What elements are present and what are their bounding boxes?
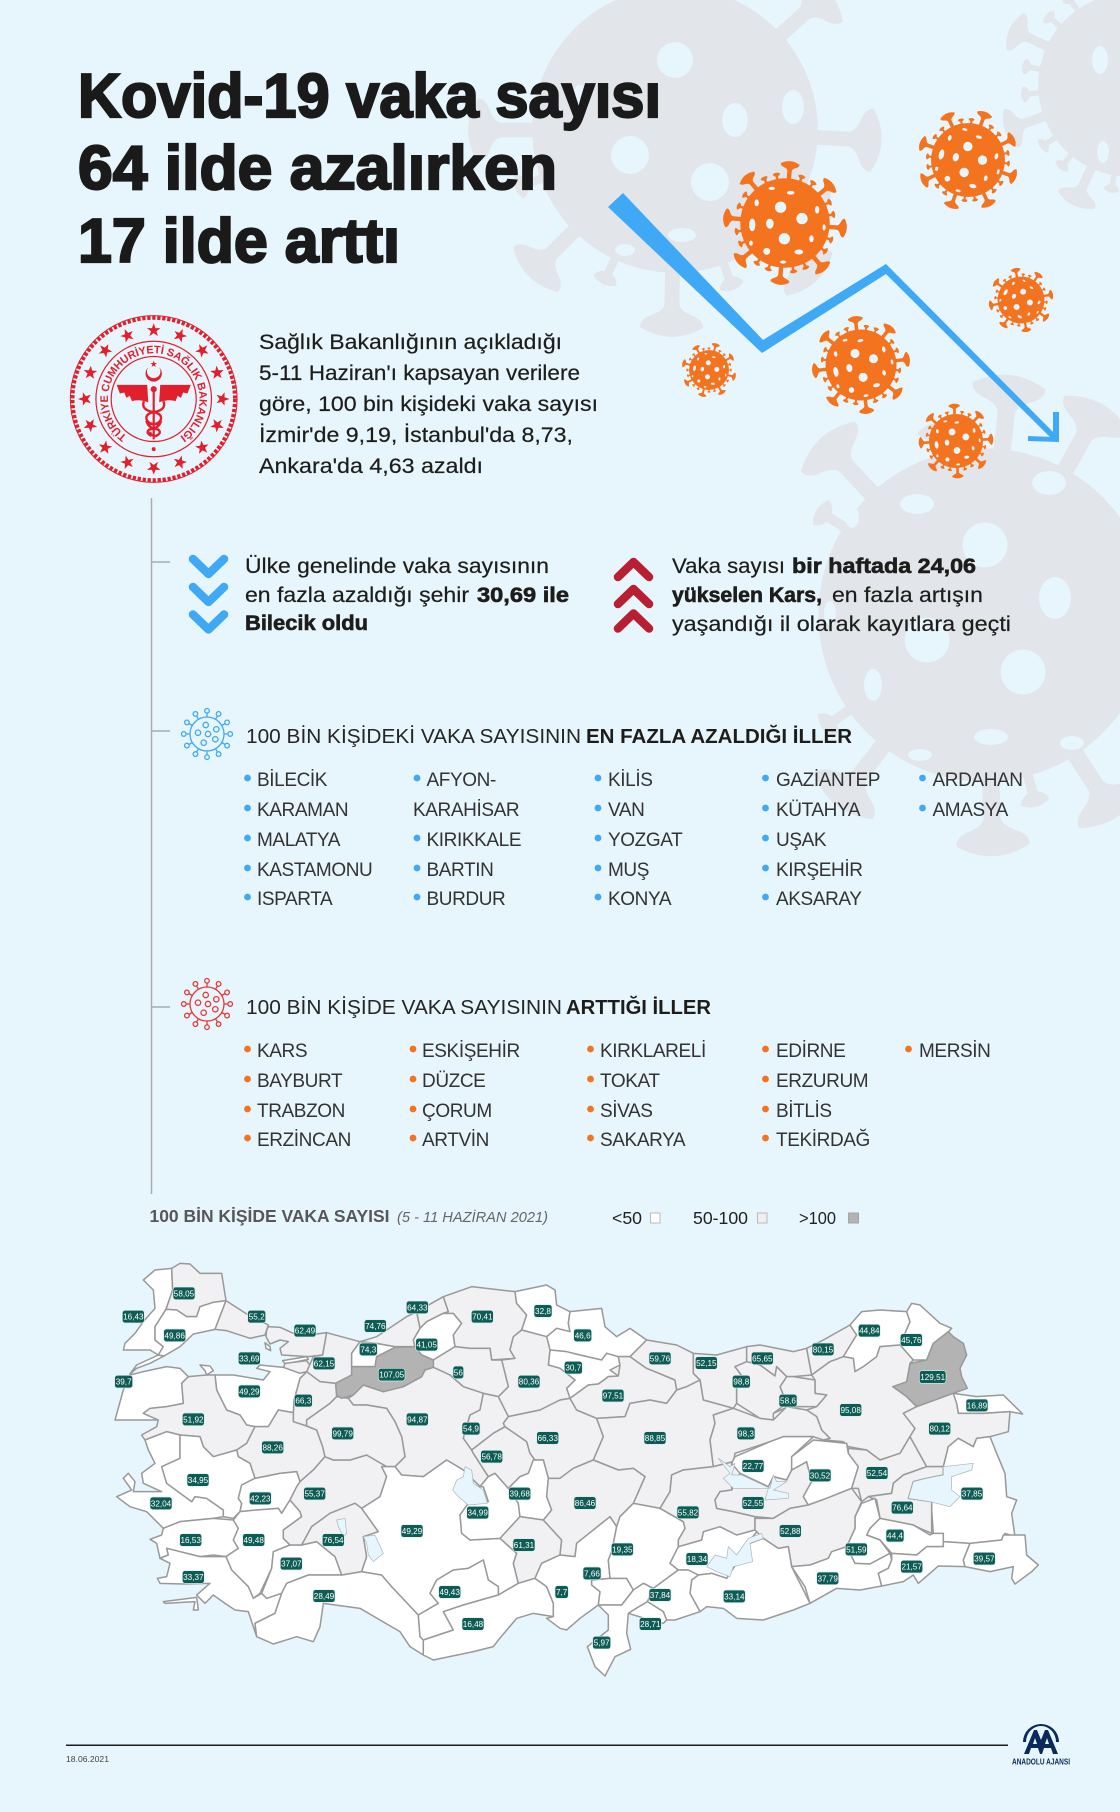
list: provinces with increase: EDİRNE	[776, 1041, 845, 1062]
value labels: 34,99	[467, 1509, 488, 1518]
title: 64 ilde azalırken	[78, 134, 557, 203]
list: provinces with decline: ARDAHAN	[932, 770, 1023, 791]
callout: largest increase: Vaka sayısı	[672, 555, 785, 578]
intro text: Sağlık Bakanlığının açıkladığı	[259, 331, 562, 354]
list: provinces with increase: SİVAS	[600, 1101, 653, 1122]
provinces: central south and east	[362, 1393, 1038, 1676]
value labels: 33,37	[183, 1573, 204, 1582]
value labels: 52,15	[696, 1359, 717, 1368]
value labels: 62,15	[314, 1359, 335, 1368]
value labels: 80,15	[813, 1345, 834, 1354]
value labels: 51,59	[846, 1545, 867, 1554]
list: provinces with increase: ARTVİN	[422, 1130, 489, 1151]
value labels: 74,3	[360, 1345, 377, 1354]
value labels: 49,86	[164, 1331, 185, 1340]
value labels: 16,48	[463, 1620, 484, 1629]
value labels: 52,54	[867, 1469, 888, 1478]
heading: provinces with increase: ARTTIĞI İLLER	[566, 995, 712, 1019]
value labels: 80,12	[929, 1425, 950, 1434]
map heading: (5 - 11 HAZİRAN 2021)	[397, 1209, 548, 1226]
callout: largest decline: Ülke genelinde vaka sayısının	[245, 555, 549, 578]
logo: Ministry of Health seal	[70, 315, 238, 483]
intro text: Ankara'da 4,63 azaldı	[259, 455, 483, 478]
value labels: 19,35	[612, 1545, 633, 1554]
title: 17 ilde arttı	[78, 207, 400, 276]
value labels: 33,69	[239, 1354, 260, 1363]
list: provinces with increase: ERZİNCAN	[257, 1130, 351, 1151]
icon: blue virus outline	[182, 708, 232, 760]
value labels: 33,14	[724, 1592, 745, 1601]
value labels: 37,79	[817, 1574, 838, 1583]
value labels: 52,88	[780, 1527, 801, 1536]
value labels: 22,77	[743, 1462, 764, 1471]
lakes	[337, 1458, 973, 1577]
background virus: top right	[958, 0, 1120, 257]
value labels: 39,57	[974, 1555, 995, 1564]
list: provinces with decline: KARAHİSAR	[413, 800, 519, 821]
provinces: west	[115, 1263, 423, 1655]
callout: largest increase	[672, 555, 1011, 636]
value labels: 44,84	[859, 1327, 880, 1336]
value labels: 98,8	[733, 1378, 750, 1387]
list: provinces with increase: KIRKLARELİ	[600, 1041, 706, 1062]
icon: virus top right	[905, 97, 1031, 223]
value labels: 95,08	[840, 1406, 861, 1415]
heading: provinces with increase: 100 BİN KİŞİDE VAKA SAYISININ	[246, 996, 562, 1019]
icon: red virus outline	[182, 978, 232, 1030]
map heading	[150, 1206, 548, 1226]
map heading: 100 BİN KİŞİDE VAKA SAYISI	[150, 1206, 390, 1226]
list: provinces with decline: AKSARAY	[776, 889, 862, 910]
list: provinces with decline: KIRIKKALE	[426, 830, 521, 851]
value labels: 5,97	[594, 1639, 610, 1648]
value labels: 97,51	[603, 1392, 624, 1401]
value labels: 86,46	[575, 1499, 596, 1508]
list: provinces with increase: ÇORUM	[422, 1101, 492, 1122]
title	[78, 62, 661, 276]
value labels: 55,82	[678, 1508, 699, 1517]
list: provinces with decline: AMASYA	[932, 800, 1009, 821]
list: provinces with decline: BURDUR	[426, 889, 505, 910]
list: provinces with decline: KÜTAHYA	[776, 800, 861, 821]
value labels: 46,6	[575, 1331, 591, 1340]
value labels: 55,2	[249, 1313, 265, 1322]
value labels: 64,33	[407, 1303, 428, 1312]
list: provinces with decline	[244, 770, 1023, 910]
value labels: 59,76	[650, 1354, 671, 1363]
value labels: 16,53	[180, 1536, 201, 1545]
value labels: 65,65	[752, 1354, 773, 1363]
icon: virus bottom	[913, 398, 999, 484]
value labels: 76,64	[892, 1504, 913, 1513]
list: provinces with decline: VAN	[608, 800, 644, 821]
value labels: 70,41	[472, 1313, 493, 1322]
value labels: 49,29	[402, 1527, 423, 1536]
value labels: 58,6	[780, 1397, 796, 1406]
list: provinces with increase: TEKİRDAĞ	[776, 1129, 870, 1151]
list: provinces with increase: MERSİN	[919, 1041, 990, 1062]
icon: virus small right	[976, 255, 1066, 345]
value labels: 88,85	[645, 1434, 666, 1443]
list: provinces with decline: UŞAK	[776, 830, 827, 851]
value labels: 51,92	[183, 1415, 204, 1424]
value labels: 80,36	[519, 1378, 540, 1387]
list: provinces with increase: KARS	[257, 1041, 307, 1062]
heading: largest decline provinces: 100 BİN KİŞİDEKİ VAKA SAYISININ	[246, 725, 581, 748]
value labels: 66,33	[537, 1434, 558, 1443]
value labels: 61,31	[514, 1541, 535, 1550]
value labels: 44,4	[887, 1532, 903, 1541]
callout: largest decline: 30,69 ile	[477, 584, 569, 607]
callout: largest increase: yükselen Kars,	[672, 584, 822, 607]
timeline vertical line with ticks	[152, 498, 170, 1194]
list: provinces with increase: TOKAT	[600, 1071, 660, 1092]
icon: virus large	[722, 160, 848, 286]
list: provinces with increase	[244, 1041, 991, 1151]
value labels: 7,7	[556, 1588, 568, 1597]
list: provinces with decline: MALATYA	[257, 830, 341, 851]
arrow head	[1028, 412, 1059, 442]
callout: largest decline	[245, 555, 569, 635]
intro text: İzmir'de 9,19, İstanbul'da 8,73,	[259, 424, 573, 447]
list: provinces with decline: BİLECİK	[257, 770, 328, 791]
value labels: 88,26	[262, 1443, 283, 1452]
value labels	[115, 1287, 995, 1649]
background virus: lower	[794, 371, 1120, 857]
list: provinces with increase: TRABZON	[257, 1101, 345, 1122]
value labels: 37,07	[281, 1560, 302, 1569]
list: provinces with decline: KONYA	[608, 889, 672, 910]
heading: provinces with increase	[246, 995, 712, 1019]
value labels: 30,7	[565, 1364, 582, 1373]
list: provinces with increase: BİTLİS	[776, 1101, 832, 1122]
value labels: 56	[454, 1368, 463, 1377]
list: provinces with decline: KARAMAN	[257, 800, 348, 821]
legend: >100	[799, 1208, 836, 1228]
logo: Anadolu Ajansı: ANADOLU AJANSI	[1012, 1758, 1070, 1766]
value labels: 66,3	[295, 1397, 312, 1406]
intro text	[259, 331, 598, 478]
list: provinces with decline: GAZİANTEP	[776, 770, 880, 791]
provinces: north and central	[307, 1285, 1023, 1508]
value labels: 28,71	[640, 1620, 661, 1629]
value labels: 98,3	[738, 1429, 754, 1438]
value labels: 7,66	[584, 1569, 600, 1578]
value labels: 32,04	[151, 1499, 172, 1508]
list: provinces with decline: MUŞ	[608, 860, 649, 881]
logo: Anadolu Ajansı	[1012, 1724, 1070, 1766]
heading: largest decline provinces	[246, 724, 853, 748]
value labels: 107,05	[379, 1371, 405, 1380]
value labels: 74,76	[365, 1322, 386, 1331]
list: provinces with decline: YOZGAT	[608, 830, 683, 851]
value labels: 32,8	[535, 1307, 551, 1316]
list: provinces with decline: KİLİS	[608, 770, 652, 791]
callout: largest decline: Bilecik oldu	[245, 612, 368, 635]
list: provinces with increase: BAYBURT	[257, 1071, 343, 1092]
value labels: 76,54	[323, 1536, 344, 1545]
value labels: 16,43	[123, 1313, 144, 1322]
callout: largest increase: bir haftada 24,06	[792, 555, 976, 578]
arrow: falling trend line	[608, 193, 1058, 442]
list: provinces with decline: AFYON-	[426, 770, 496, 791]
title: Kovid-19 vaka sayısı	[78, 62, 661, 131]
value labels: 49,43	[439, 1588, 460, 1597]
value labels: 41,05	[416, 1341, 437, 1350]
background virus: upper	[468, 0, 883, 337]
icon: virus middle	[802, 306, 920, 424]
icon: triple down chevrons	[193, 559, 224, 630]
value labels: 28,49	[314, 1592, 335, 1601]
value labels: 30,52	[810, 1471, 831, 1480]
list: provinces with increase: ERZURUM	[776, 1071, 868, 1092]
value labels: 99,79	[332, 1429, 353, 1438]
list: provinces with decline: KIRŞEHİR	[776, 860, 863, 881]
value labels: 52,55	[743, 1499, 764, 1508]
callout: largest increase: yaşandığı il olarak kayıtlara geçti	[672, 613, 1011, 636]
callout: largest decline: en fazla azaldığı şehir	[245, 584, 469, 607]
list: provinces with decline: BARTIN	[426, 860, 493, 881]
icon: triple up chevrons	[618, 562, 649, 628]
legend: <50	[612, 1208, 642, 1228]
value labels: 56,78	[481, 1453, 502, 1462]
value labels: 37,85	[962, 1490, 983, 1499]
intro text: 5-11 Haziran'ı kapsayan verilere	[259, 362, 580, 385]
value labels: 129,51	[920, 1373, 946, 1382]
legend: 50-100	[693, 1208, 748, 1228]
value labels: 54,9	[463, 1425, 479, 1434]
value labels: 49,48	[243, 1536, 264, 1545]
value labels: 37,84	[650, 1591, 671, 1600]
value labels: 16,89	[967, 1401, 988, 1410]
value labels: 18,34	[687, 1555, 708, 1564]
value labels: 34,95	[188, 1476, 209, 1485]
value labels: 49,29	[239, 1387, 260, 1396]
list: provinces with increase: DÜZCE	[422, 1071, 485, 1092]
list: provinces with increase: ESKİŞEHİR	[422, 1041, 520, 1062]
footer rule	[66, 1744, 1008, 1746]
list: provinces with decline: ISPARTA	[257, 889, 333, 910]
illustration: orange viruses and falling arrow	[608, 97, 1066, 484]
value labels: 55,37	[304, 1490, 325, 1499]
icon: virus small left	[677, 338, 741, 402]
intro text: göre, 100 bin kişideki vaka sayısı	[259, 393, 598, 416]
logo: Ministry of Health seal: TÜRKİYE CUMHURİYETİ SAĞLIK BAKANLIĞI	[100, 344, 207, 442]
list: provinces with increase: SAKARYA	[600, 1130, 686, 1151]
legend	[612, 1208, 858, 1228]
value labels: 45,76	[901, 1336, 922, 1345]
value labels: 39,7	[116, 1378, 132, 1387]
value labels: 58,05	[174, 1289, 195, 1298]
heading: largest decline provinces: EN FAZLA AZALDIĞI İLLER	[586, 724, 853, 748]
value labels: 62,49	[295, 1327, 316, 1336]
value labels: 94,87	[407, 1415, 428, 1424]
map: Türkiye provinces by case rate	[115, 1263, 1038, 1676]
value labels: 42,23	[250, 1494, 271, 1503]
list: provinces with decline: KASTAMONU	[257, 860, 372, 881]
date: 18.06.2021	[66, 1755, 110, 1764]
value labels: 39,68	[509, 1490, 530, 1499]
value labels: 21,57	[901, 1563, 922, 1572]
callout: largest increase: en fazla artışın	[832, 584, 983, 607]
